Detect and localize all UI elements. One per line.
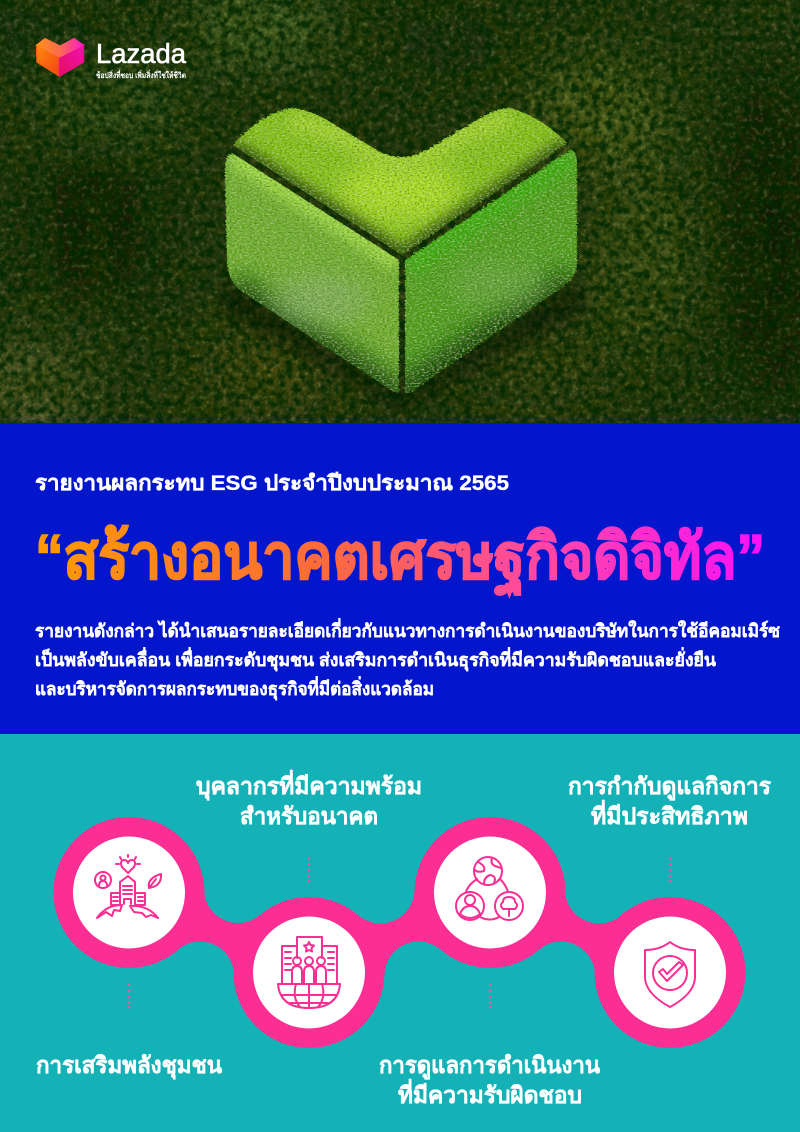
body text: เป็นพลังขับเคลื่อน เพื่อยกระดับชุมชน ส่งเสริมการดำเนินธุรกิจที่มีความรับผิดชอบและยั่งยืน xyxy=(35,647,717,672)
pink connected circles chain xyxy=(54,817,746,1048)
label: responsible operations: ที่มีความรับผิดชอบ xyxy=(398,1078,582,1108)
panel: hero photo of moss landscape xyxy=(0,0,800,430)
icon: Lazada heart xyxy=(36,38,84,76)
panel: blue intro xyxy=(0,423,800,734)
body text xyxy=(35,618,780,701)
heading: รายงานผลกระทบ ESG ประจำปีงบประมาณ 2565 xyxy=(35,471,509,495)
icon: grass heart-shaped box xyxy=(220,100,585,410)
icon: people and globe xyxy=(278,937,340,1008)
label: responsible operations: การดูแลการดำเนินงาน xyxy=(379,1052,600,1080)
logo tagline: ช้อปสิ่งที่ชอบ เพิ่มสิ่งที่ใช่ให้ชีวิต xyxy=(96,69,186,80)
icon: globe person tree cycle xyxy=(456,857,523,920)
grass top face xyxy=(234,108,567,256)
label: governance: การกำกับดูแลกิจการ xyxy=(568,773,772,801)
dotted connector lines xyxy=(128,857,671,1008)
icon: community buildings xyxy=(95,855,161,918)
panel: teal pillars xyxy=(0,734,800,1132)
label: people: บุคลากรที่มีความพร้อม xyxy=(196,769,422,801)
grass right face xyxy=(404,150,578,394)
icon: shield check xyxy=(645,942,695,1007)
label: responsible operations xyxy=(379,1052,600,1108)
body text: และบริหารจัดการผลกระทบของธุรกิจที่มีต่อสิ่งแวดล้อม xyxy=(35,676,434,701)
body text: รายงานดังกล่าว ได้นำเสนอรายละเอียดเกี่ยวกับแนวทางการดำเนินงานของบริษัทในการใช้อีคอมเมิร์ซ xyxy=(35,618,780,641)
label: people xyxy=(196,769,422,829)
logo: Lazada xyxy=(36,38,186,80)
label: people: สำหรับอนาคต xyxy=(240,803,378,829)
label: governance: ที่มีประสิทธิภาพ xyxy=(591,799,748,829)
label: community: การเสริมพลังชุมชน xyxy=(36,1052,222,1080)
logo wordmark: Lazada xyxy=(96,38,186,69)
grass left face xyxy=(224,152,400,392)
label: governance xyxy=(568,773,772,829)
